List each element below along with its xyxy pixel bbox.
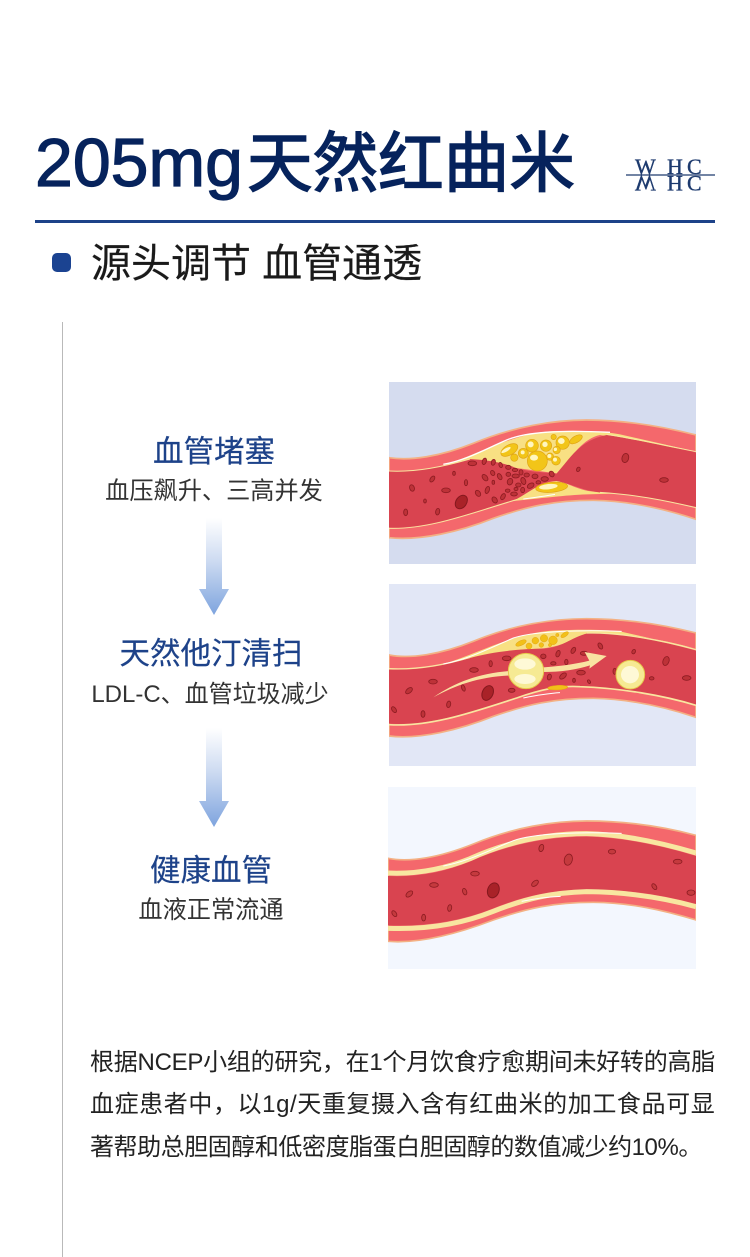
title: 天然红曲米 [247,127,575,200]
large red blood cell [485,881,501,899]
large red blood cell [480,684,496,702]
body paragraph: 血症患者中，以1g/天重复摄入含有红曲米的加工食品可显 [90,1091,715,1118]
artery wall [388,821,696,942]
red blood cells [404,453,668,516]
body paragraph [90,1049,715,1161]
illustration: statin clearing [389,584,696,766]
plaque deposit [443,630,696,664]
step 3 description: 血液正常流通 [138,897,284,924]
illustration: healthy artery [388,787,696,969]
small fat globules [515,631,569,691]
logo: WHC mirrored monogram: WHC [635,171,702,196]
blood lumen [389,435,696,528]
wall highlights [443,631,622,664]
title [35,125,575,201]
logo: WHC mirrored monogram: WHC [635,154,702,179]
logo: WHC mirrored monogram [626,154,715,196]
arrow: step 2 to step 3 [199,735,229,827]
artery wall [389,619,696,737]
illustration: blocked artery [389,382,696,564]
plaque deposit [443,431,696,473]
blood lumen [388,837,696,926]
red blood cells [390,642,691,717]
body paragraph: 根据NCEP小组的研究，在1个月饮食疗愈期间未好转的高脂 [90,1049,715,1076]
fat globules [499,433,584,494]
flow arrow [433,652,607,697]
step 3 heading: 健康血管 [150,854,272,888]
artery wall [389,420,696,538]
body paragraph: 著帮助总胆固醇和低密度脂蛋白胆固醇的数值减少约10%。 [90,1134,702,1161]
blood lumen [389,633,696,724]
subheading: 源头调节 血管通透 [91,242,422,286]
step 1 description: 血压飙升、三高并发 [105,478,323,505]
step 1 heading: 血管堵塞 [153,435,275,469]
red blood cells [391,844,695,921]
bullet icon [52,253,71,272]
wall highlights [443,833,622,866]
inner wall lining [388,834,696,873]
wall highlights [443,431,610,464]
large red blood cell [453,493,470,511]
cholesterol globules [508,653,544,689]
step 2 heading: 天然他汀清扫 [120,637,302,671]
header rule [35,220,715,223]
arrow: step 1 to step 2 [199,525,229,615]
timeline vertical line [62,322,63,1257]
title: 205mg [35,125,243,201]
step 2 description: LDL-C、血管垃圾减少 [91,681,329,708]
